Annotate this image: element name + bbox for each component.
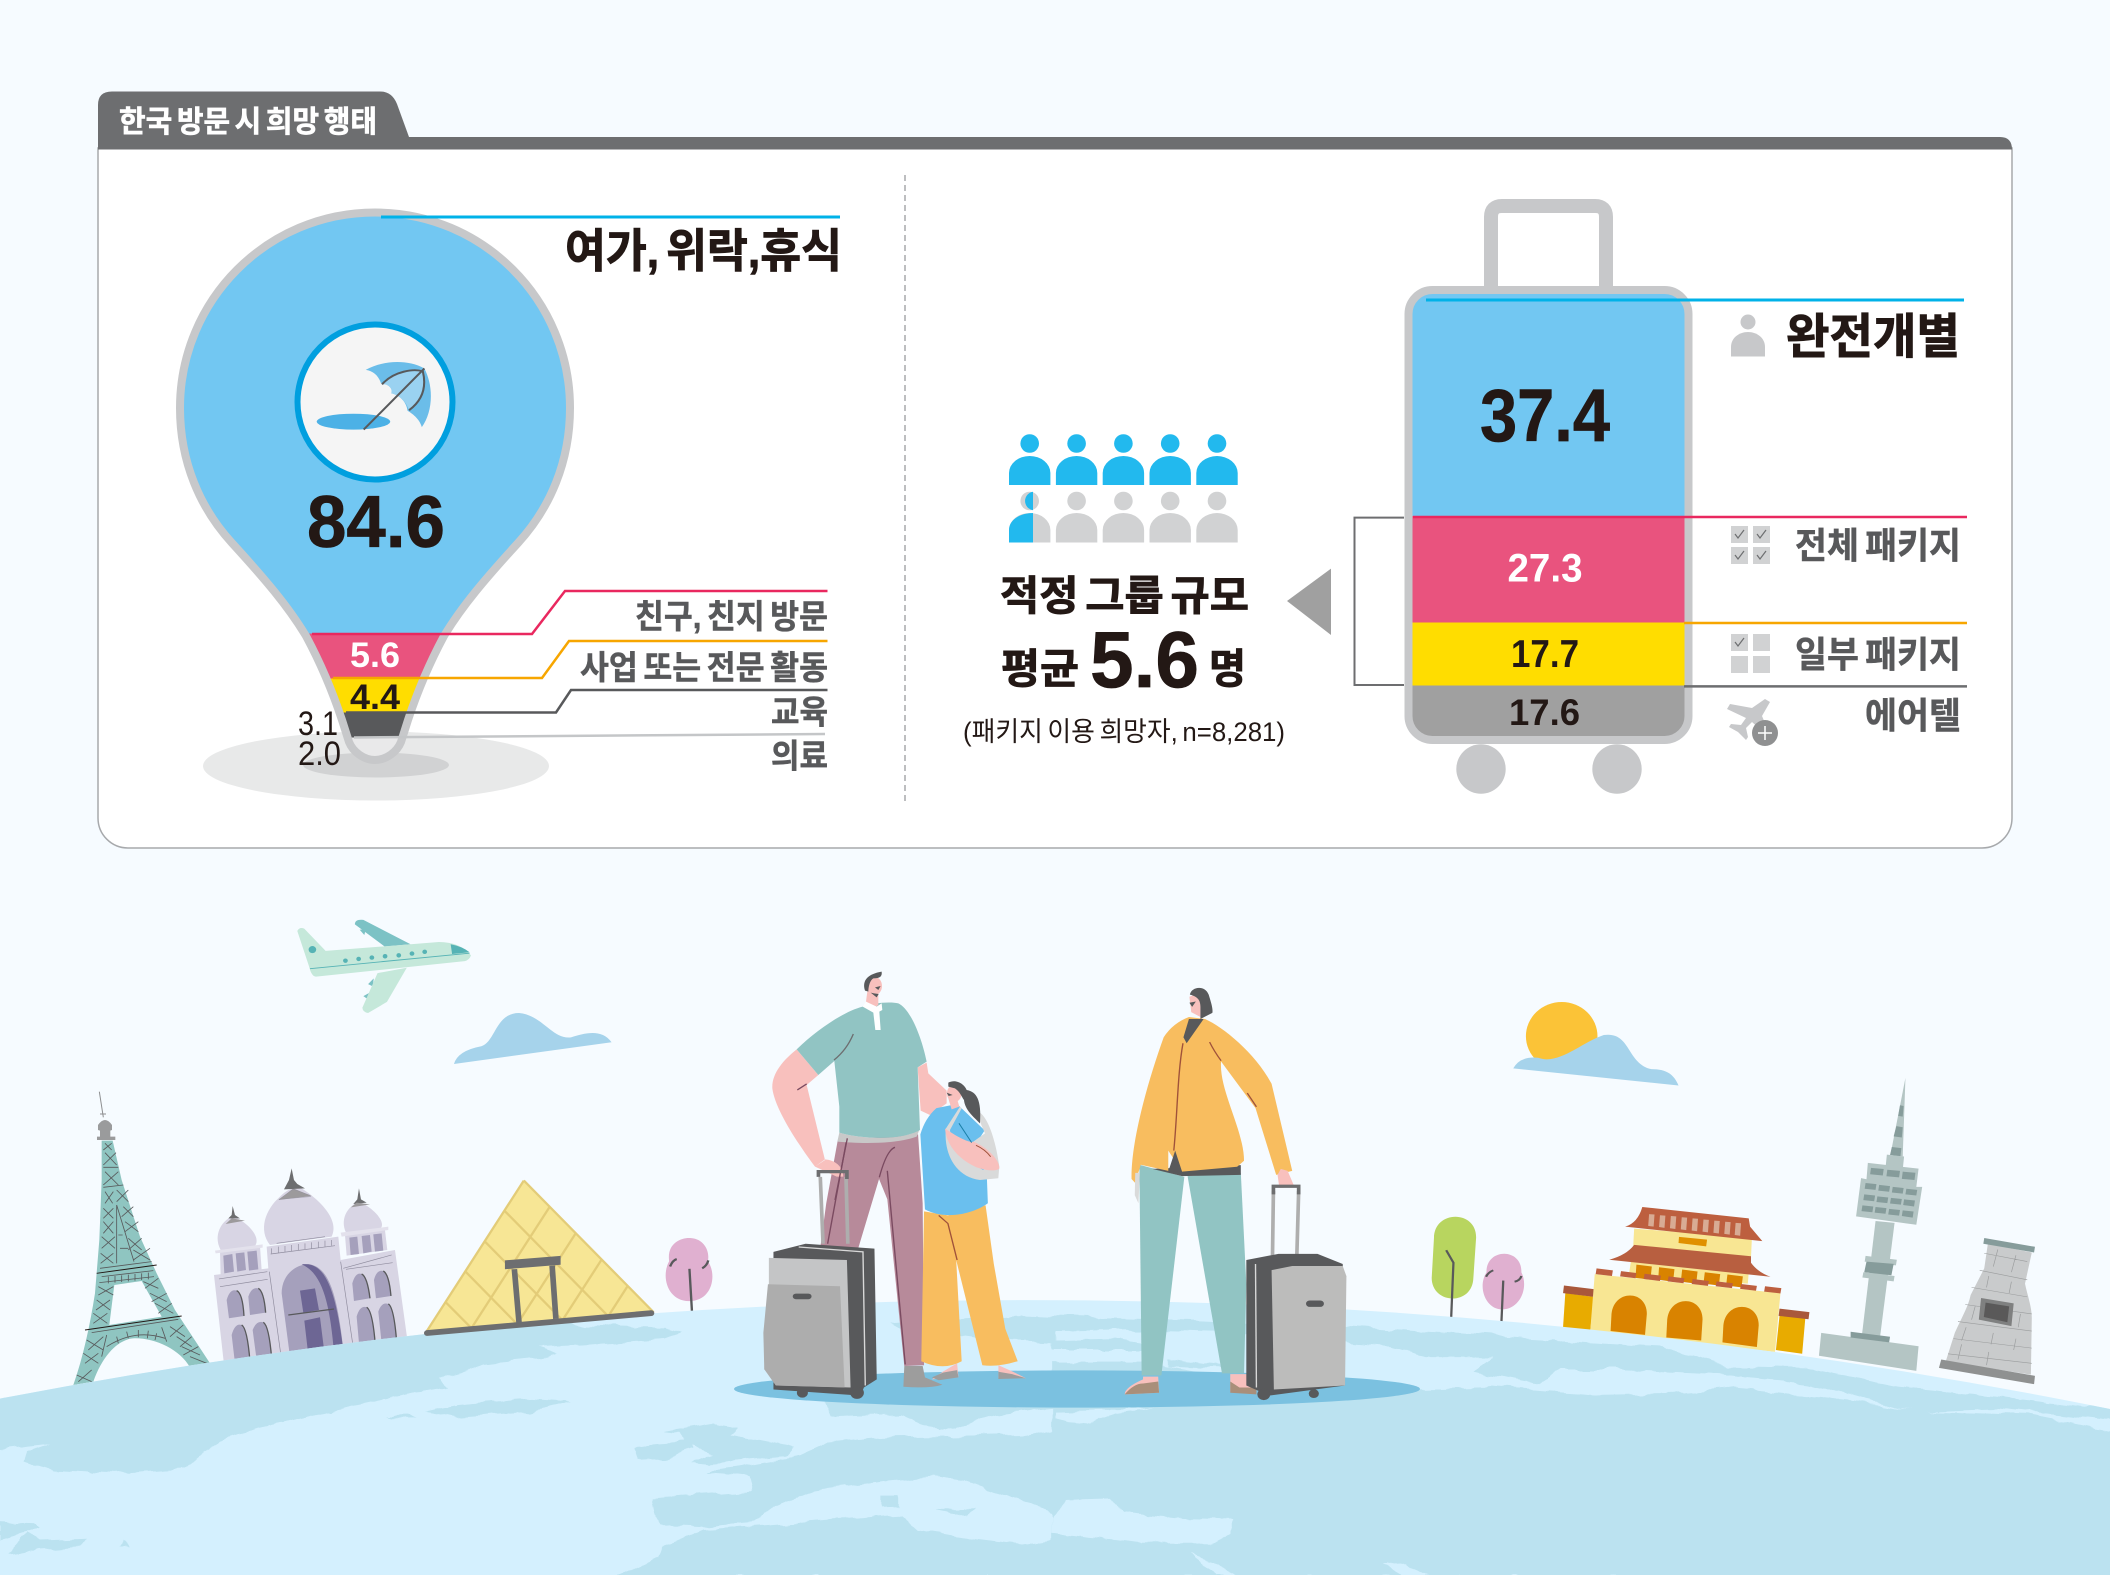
leader line and label: medical bbox=[354, 734, 828, 774]
block: ideal group size bbox=[963, 434, 1285, 747]
pin ground shadow bbox=[203, 732, 549, 800]
legend: partial package: 일부 패키지 bbox=[1795, 634, 1961, 675]
value: average 5.6 people bbox=[1001, 615, 1246, 704]
value 84.6: 84.6 bbox=[307, 482, 445, 563]
illustration: small pink tree bbox=[1483, 1254, 1524, 1322]
illustration: Taj Mahal bbox=[214, 1168, 408, 1373]
value: average 5.6 people: 평균 bbox=[1001, 646, 1079, 692]
value 17.6: 17.6 bbox=[1509, 692, 1580, 733]
illustration: green tree bbox=[1432, 1217, 1476, 1318]
illustration: N Seoul Tower bbox=[1819, 1078, 1922, 1371]
legend: air and hotel bbox=[1684, 686, 1967, 746]
leader line and label: visiting friends: 친구, 친지 방문 bbox=[635, 598, 828, 635]
illustration: suitcase left bbox=[763, 1172, 877, 1399]
illustration: father bbox=[772, 972, 947, 1387]
suitcase handle bbox=[1491, 206, 1606, 290]
illustration: travellers bbox=[734, 972, 1420, 1408]
leader line and label: leisure: 여가, 위락,휴식 bbox=[565, 225, 842, 277]
travellers ground shadow bbox=[734, 1370, 1420, 1408]
value 3.1: 3.1 bbox=[298, 705, 338, 743]
value 17.7: 17.7 bbox=[1511, 633, 1579, 676]
icon: beach umbrella bbox=[298, 324, 452, 480]
value 4.4: 4.4 bbox=[350, 678, 401, 717]
legend: fully independent: 완전개별 bbox=[1786, 311, 1960, 364]
illustration: Louvre pyramid bbox=[426, 1181, 654, 1333]
legend: fully independent bbox=[1426, 300, 1964, 364]
heading: ideal group size: 적정 그룹 규모 bbox=[1000, 573, 1249, 619]
suitcase segments bbox=[1405, 285, 1695, 746]
arrow: pointing to group size bbox=[1287, 569, 1331, 635]
illustration: Eiffel Tower bbox=[73, 1092, 210, 1385]
pin body segments bbox=[184, 216, 566, 756]
illustration: globe with map bbox=[0, 1300, 2110, 1575]
suitcase wheels bbox=[1456, 744, 1642, 794]
illustration: cloud with sun bbox=[1513, 1035, 1679, 1086]
leader line and label: medical: 의료 bbox=[771, 738, 828, 774]
leader line and label: education: 교육 bbox=[771, 694, 828, 730]
illustration: Cheomseongdae bbox=[1939, 1238, 2035, 1384]
value: average 5.6 people: 명 bbox=[1209, 646, 1246, 692]
illustration: child bbox=[920, 1081, 1026, 1380]
chart: suitcase stacked by travel type bbox=[1405, 206, 1967, 794]
illustration: pink tree bbox=[666, 1238, 712, 1317]
value 2.0: 2.0 bbox=[298, 735, 341, 773]
leader line and label: business bbox=[333, 641, 828, 686]
illustration: mother bbox=[1125, 988, 1295, 1394]
illustration: Gwanghwamun palace gate bbox=[1563, 1207, 1809, 1354]
leader line and label: education bbox=[346, 690, 828, 730]
panel: hopes when visiting Korea bbox=[98, 92, 2012, 848]
value: average 5.6 people: 5.6 bbox=[1090, 615, 1199, 704]
illustration: right landmarks, sun and cloud bbox=[1432, 1002, 2035, 1384]
note: sample size: (패키지 이용 희망자, n=8,281) bbox=[963, 717, 1285, 747]
legend: full package: 전체 패키지 bbox=[1795, 525, 1961, 566]
legend: air and hotel: 에어텔 bbox=[1865, 695, 1961, 736]
legend: partial package bbox=[1684, 623, 1967, 675]
leader line and label: visiting friends bbox=[312, 591, 828, 635]
illustration: sun bbox=[1526, 1002, 1597, 1070]
leader line and label: business: 사업 또는 전문 활동 bbox=[580, 649, 828, 686]
illustration: suitcase right bbox=[1246, 1186, 1346, 1400]
legend: full package bbox=[1413, 517, 1967, 566]
value 5.6: 5.6 bbox=[350, 636, 400, 675]
value 37.4: 37.4 bbox=[1480, 374, 1610, 457]
icon: row of people bbox=[1009, 434, 1238, 542]
illustration: cloud bbox=[454, 1013, 612, 1064]
panel tab heading: 한국 방문 시 희망 행태 bbox=[119, 106, 377, 139]
illustration: airplane bbox=[297, 920, 471, 1013]
chart: map pin stacked by purpose of visit bbox=[170, 200, 842, 800]
panel tab heading bbox=[98, 92, 409, 139]
value 27.3: 27.3 bbox=[1508, 546, 1582, 590]
